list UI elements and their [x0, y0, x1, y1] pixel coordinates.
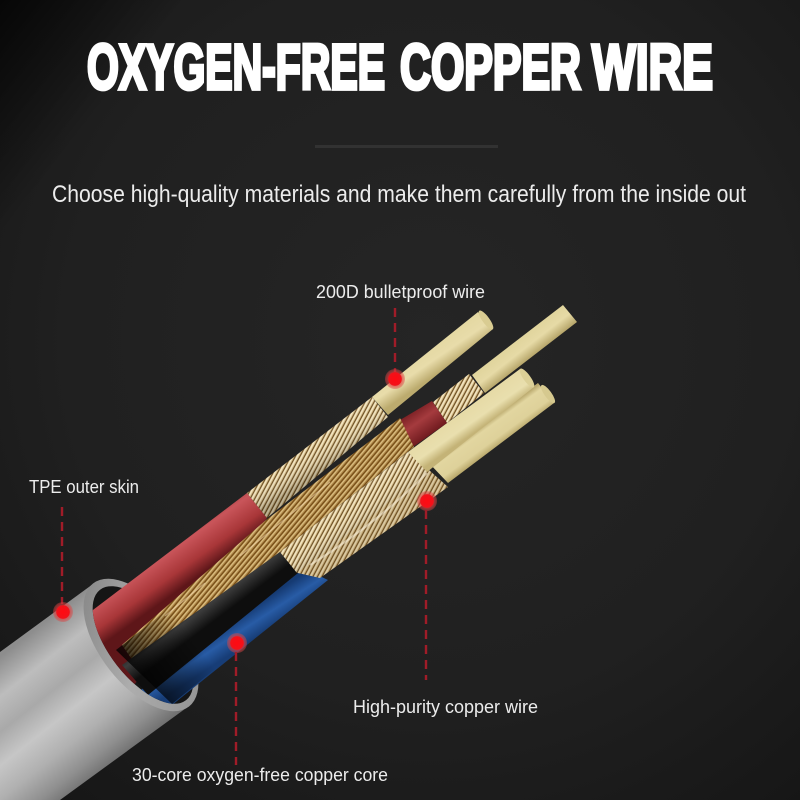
yellow core 3	[408, 367, 537, 472]
dark red insulation	[400, 401, 447, 447]
central copper strands	[122, 418, 414, 664]
blue insulated wire	[138, 568, 328, 705]
outer tube	[0, 559, 221, 800]
yellow core 1	[372, 309, 496, 415]
yellow core 4	[428, 383, 557, 483]
rear copper strands	[433, 374, 484, 423]
divider	[315, 145, 498, 148]
lower copper bundle	[280, 462, 448, 578]
rear yellow core	[472, 305, 577, 393]
hole shadow	[116, 610, 210, 704]
white strand highlight	[310, 473, 427, 565]
front copper bundle	[280, 452, 428, 573]
black insulated wire	[122, 552, 298, 695]
callout: TPE outer skin	[29, 477, 139, 622]
callout: high-purity copper wire: High-purity copper wire	[353, 697, 538, 717]
title: OXYGEN-FREE	[87, 31, 385, 103]
title: WIRE	[592, 31, 713, 103]
cable illustration	[0, 305, 577, 800]
title: COPPER	[400, 31, 581, 103]
inner wires	[85, 305, 577, 705]
callout: 30-core oxygen-free copper core: 30-core oxygen-free copper core	[132, 765, 388, 785]
callout: high-purity copper wire	[353, 491, 538, 717]
callout: 30-core oxygen-free copper core	[132, 633, 388, 785]
callout: TPE outer skin: TPE outer skin	[29, 477, 139, 497]
callout: 200D bulletproof wire: 200D bulletproof wire	[316, 282, 485, 302]
red insulated wire	[85, 493, 267, 690]
upper copper bundle	[247, 397, 388, 518]
callout: 200D bulletproof wire	[316, 282, 485, 389]
